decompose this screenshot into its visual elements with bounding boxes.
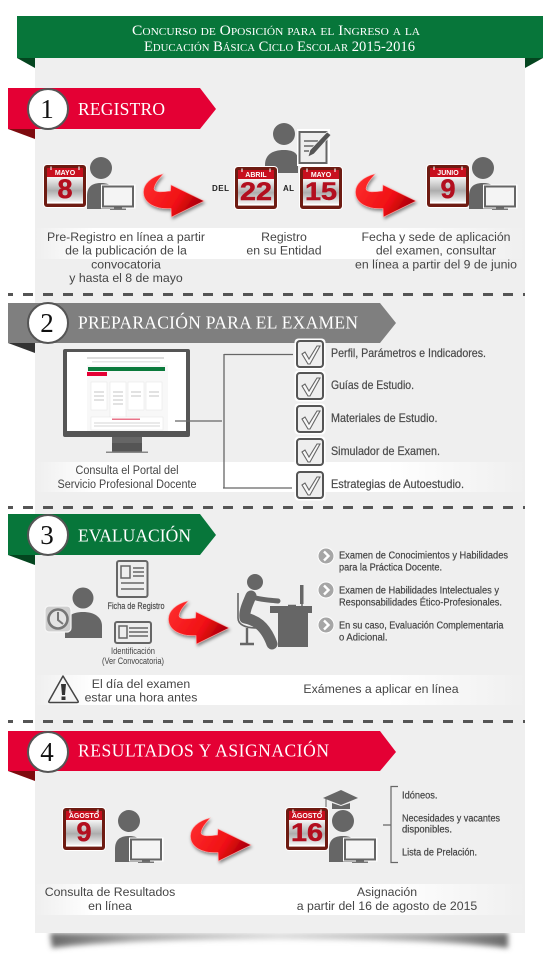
text: fecha y sede: del examen, consultar [376, 244, 496, 258]
text: fecha y sede: Fecha y sede de aplicación [361, 230, 511, 244]
bracket [383, 786, 398, 862]
calendar: 9 agosto: 9 [76, 817, 92, 847]
icon: ficha de registro: Ficha de Registro [108, 601, 164, 612]
bullet 1 [318, 548, 508, 574]
text: pre-registro: Pre-Registro en línea a partir [47, 230, 205, 244]
list: results: disponibles. [402, 824, 452, 836]
arrow 3 [168, 601, 229, 644]
check 3 [294, 404, 438, 434]
text: registro: en su Entidad [246, 244, 322, 258]
icon: identificacion [102, 622, 164, 666]
bullet 1: Examen de Conocimientos y Habilidades [339, 550, 508, 562]
section 3 ribbon: evaluacion: EVALUACIÓN [78, 526, 191, 546]
check 4: Simulador de Examen. [331, 444, 440, 458]
arrow 1 [144, 174, 204, 217]
check 4 [294, 436, 440, 468]
text: asignacion: a partir del 16 de agosto de 2015 [297, 899, 477, 913]
text: registro: Registro [261, 230, 307, 244]
arrow 2 [356, 174, 416, 217]
text: consulta resultados: en línea [88, 899, 132, 913]
check 2 [294, 370, 414, 402]
section 3 ribbon: evaluacion: 3 [40, 520, 54, 550]
section 4 ribbon: resultados: 4 [40, 737, 54, 767]
section 3 ribbon: evaluacion [8, 514, 216, 565]
calendar: 9 agosto: ÁGOSTÓ [69, 811, 100, 820]
check 2: Guías de Estudio. [331, 378, 414, 392]
check 3: Materiales de Estudio. [331, 411, 438, 425]
strip: section 2 [35, 462, 525, 492]
bullet 3: En su caso, Evaluación Complementaria [339, 620, 504, 632]
section 1 ribbon: registro: 1 [40, 94, 54, 124]
calendar: 8 mayo: 8 [57, 174, 73, 204]
section 1 ribbon: registro [8, 88, 216, 139]
drop shadow under panel [50, 933, 508, 948]
calendar: 22 abril [234, 166, 278, 210]
calendar: 16 agosto: ÁGOSTÓ [292, 811, 323, 820]
list: results [402, 790, 500, 858]
section 4 ribbon: resultados [8, 731, 396, 781]
text: fecha y sede: en línea a partir del 9 de junio [355, 257, 517, 271]
calendar: 8 mayo [43, 164, 87, 208]
list: results: Idóneos. [402, 790, 438, 802]
label: del: DEL [212, 184, 229, 193]
icon: warning [49, 676, 78, 702]
check 5: Estrategias de Autoestudio. [331, 477, 464, 491]
section 1 ribbon: registro: REGISTRO [78, 99, 165, 119]
icon: user at computer [469, 157, 518, 210]
connector lines [175, 354, 293, 488]
icon: user at computer [87, 157, 136, 210]
calendar: 22 abril: ABRIL [245, 172, 267, 179]
arrow 4 [190, 818, 251, 861]
section 2 ribbon: preparacion: PREPARACIÓN PARA EL EXAMEN [78, 312, 358, 332]
calendar: 9 junio: JUNIO [437, 170, 459, 177]
calendar: 15 mayo: 15 [305, 178, 337, 206]
text: pre-registro: convocatoria [91, 257, 161, 271]
section 2 ribbon: preparacion [8, 303, 396, 353]
calendar: 16 agosto: 16 [291, 819, 323, 847]
calendar: 9 junio: 9 [440, 174, 456, 204]
icon: graduate at computer [323, 790, 378, 863]
icon: identificacion: Identificación [111, 646, 155, 656]
strip: section 3 [35, 675, 525, 705]
bullet 3: o Adicional. [339, 632, 388, 644]
strip: section 4 [35, 884, 525, 915]
calendar: 16 agosto [285, 807, 329, 851]
icon: person at desk [238, 574, 312, 647]
list: results: Lista de Prelación. [402, 848, 477, 858]
text: examenes en linea: Exámenes a aplicar en línea [303, 682, 459, 696]
text: consulta portal [58, 463, 197, 491]
connector vertical overlay [223, 462, 292, 488]
calendar: 15 mayo [299, 166, 343, 210]
text: pre-registro: y hasta el 8 de mayo [69, 271, 183, 285]
icon: user with clock [45, 588, 102, 638]
icon: monitor with portal [63, 349, 190, 453]
calendar: 9 agosto [62, 807, 106, 851]
bullet 1: para la Práctica Docente. [339, 562, 442, 574]
text: consulta portal: Consulta el Portal del [76, 463, 178, 477]
title banner: Concurso de Oposición para el Ingreso a la [132, 23, 420, 39]
text: el dia del examen: El día del examen [92, 677, 190, 691]
strip: section 1 [35, 228, 525, 259]
background panel [35, 58, 525, 933]
calendar: 8 mayo: MAYO [55, 170, 76, 177]
section 4 ribbon: resultados: RESULTADOS Y ASIGNACIÓN [78, 740, 329, 760]
icon: identificacion: (Ver Convocatoria) [102, 656, 164, 666]
text: el dia del examen: estar una hora antes [85, 691, 197, 705]
bullet 2 [318, 582, 502, 608]
check 5 [294, 470, 464, 500]
text: consulta portal: Servicio Profesional Docente [58, 477, 197, 491]
calendar: 22 abril: 22 [240, 178, 272, 206]
list: results: Necesidades y vacantes [402, 814, 500, 824]
check 1: Perfil, Parámetros e Indicadores. [331, 346, 486, 360]
bullet 3 [318, 616, 504, 644]
icon: ficha de registro [108, 561, 164, 612]
bullet 2: Responsabilidades Ético-Profesionales. [339, 598, 502, 608]
icon: user at computer [115, 810, 164, 863]
check 1 [294, 338, 486, 370]
calendar: 9 junio [426, 164, 470, 208]
title banner: Educación Básica Ciclo Escolar 2015-2016 [144, 39, 415, 55]
section 2 ribbon: preparacion: 2 [40, 308, 54, 338]
text: pre-registro: de la publicación de la [65, 244, 187, 258]
calendar: 15 mayo: MAYO [311, 172, 332, 179]
icon: user filling in form [265, 123, 331, 173]
label: al: AL [283, 184, 294, 193]
bullet 2: Examen de Habilidades Intelectuales y [339, 586, 499, 596]
text: asignacion: Asignación [357, 885, 417, 899]
title banner [17, 16, 543, 68]
text: consulta resultados: Consulta de Resultados [45, 885, 175, 899]
